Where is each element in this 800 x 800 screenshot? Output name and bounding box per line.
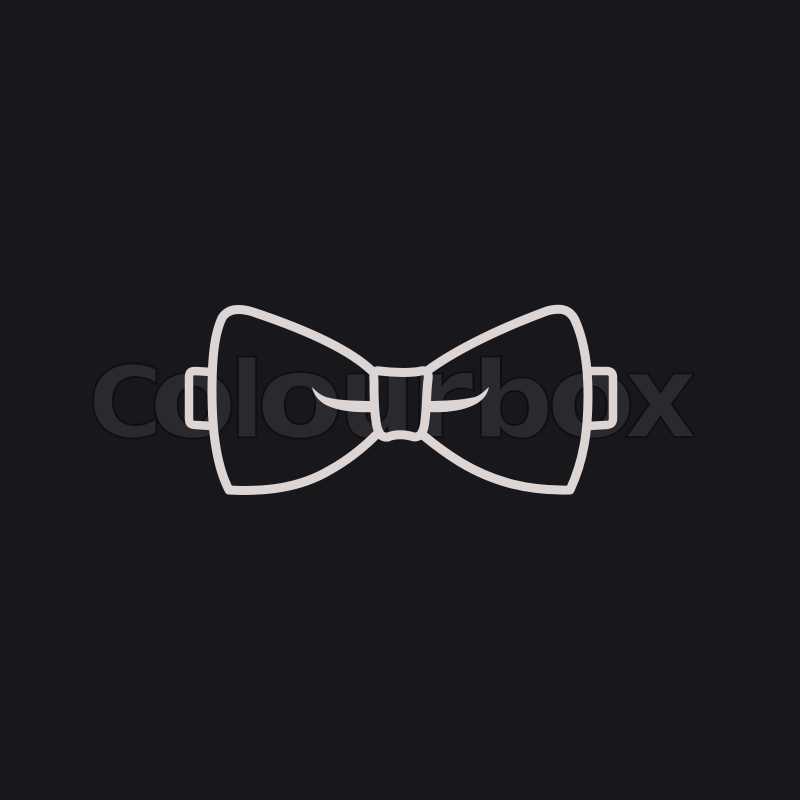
watermark: Colourbox: l [229, 339, 265, 462]
icon: bow tie [189, 309, 613, 490]
center knot [374, 371, 428, 437]
right fold crease [426, 387, 489, 412]
watermark: Colourbox: u [338, 330, 416, 465]
watermark: Colourbox: x [624, 330, 697, 465]
watermark: Colourbox: o [256, 330, 344, 465]
left wing outline [212, 310, 377, 490]
watermark: Colourbox: b [471, 339, 554, 462]
left strap buckle [189, 371, 212, 426]
watermark: Colourbox [88, 330, 697, 465]
watermark: Colourbox: C [88, 346, 163, 461]
watermark: Colourbox: r [408, 330, 474, 465]
right strap buckle [588, 371, 613, 426]
left fold crease [312, 387, 376, 412]
watermark: Colourbox: o [149, 330, 237, 465]
right wing outline [424, 309, 588, 490]
watermark: Colourbox: o [546, 330, 636, 465]
